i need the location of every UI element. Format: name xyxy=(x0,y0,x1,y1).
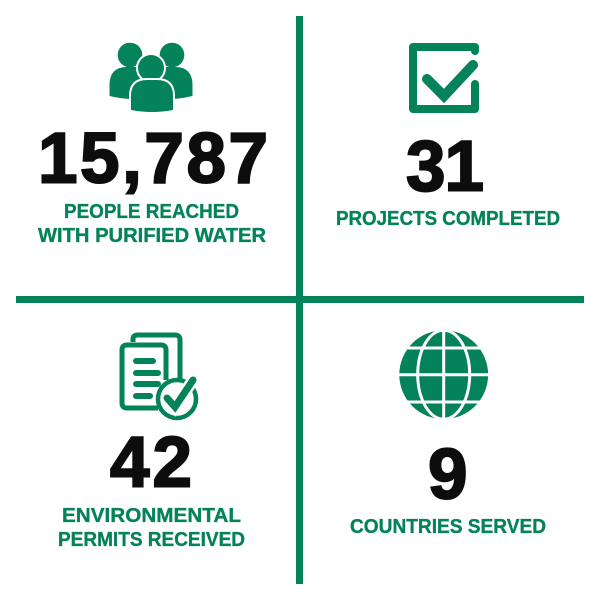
label: projects completed: PROJECTS COMPLETED xyxy=(336,207,560,230)
label: environmental permits received: ENVIRONMENTAL xyxy=(62,504,241,527)
panel: projects completed xyxy=(336,47,560,230)
panel: environmental permits xyxy=(58,335,245,551)
label: countries served: COUNTRIES SERVED xyxy=(350,515,546,538)
label: environmental permits received xyxy=(58,504,245,551)
number: 15,787: 15,787 xyxy=(38,120,268,198)
number: 42: 42 xyxy=(110,424,192,502)
label: people reached with purified water: WITH PURIFIED WATER xyxy=(38,224,266,247)
label: environmental permits received: PERMITS RECEIVED xyxy=(58,528,245,551)
icon: people group xyxy=(110,43,192,112)
icon: globe xyxy=(399,330,489,420)
panel: people reached xyxy=(38,43,268,247)
icon: documents with check xyxy=(122,335,196,418)
number: 31: 31 xyxy=(406,128,484,206)
label: people reached with purified water xyxy=(38,200,266,247)
number: 9: 9 xyxy=(428,436,468,514)
icon: checkbox xyxy=(413,47,475,109)
panel: countries served xyxy=(350,330,546,538)
label: people reached with purified water: PEOPLE REACHED xyxy=(64,200,239,223)
